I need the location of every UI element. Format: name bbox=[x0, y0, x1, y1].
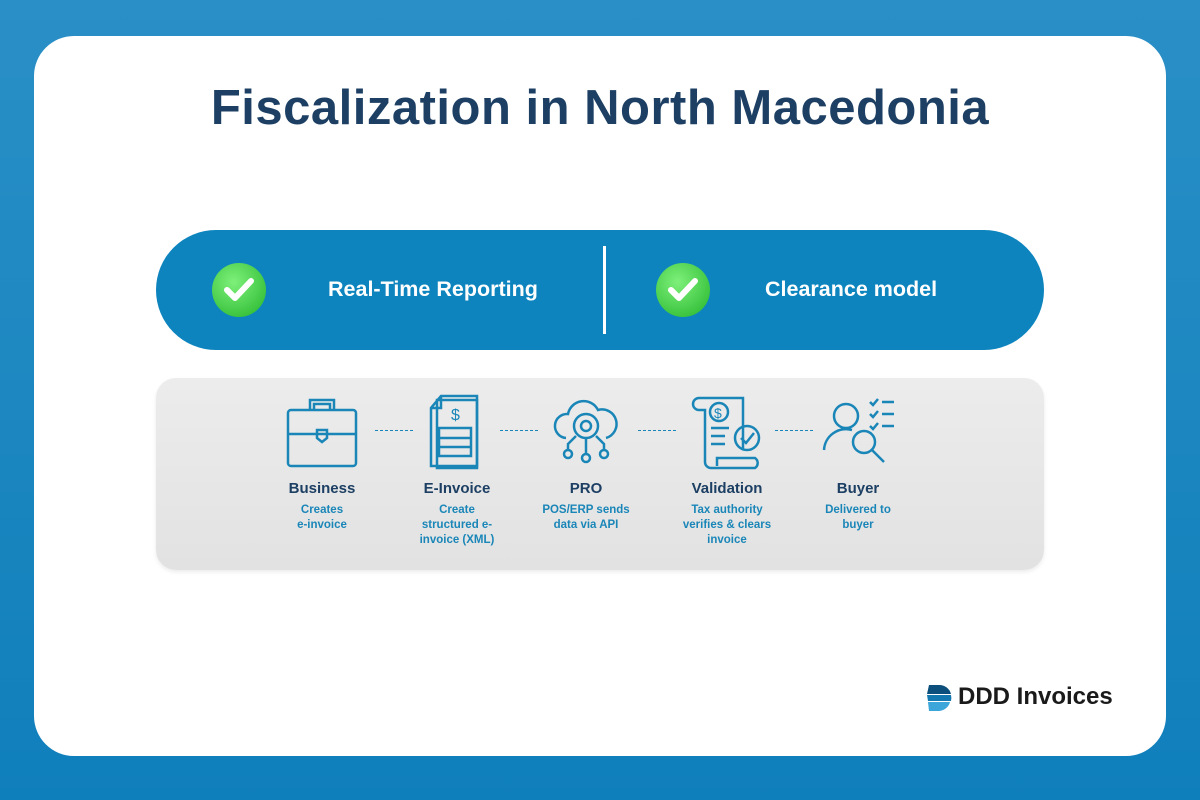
step: PRO: data via API bbox=[554, 519, 618, 531]
step: business bbox=[286, 398, 358, 531]
step: e-invoice: Create bbox=[439, 504, 475, 516]
arrow bbox=[775, 430, 813, 431]
title: Fiscalization in North Macedonia bbox=[211, 81, 989, 135]
step: validation: Tax authority bbox=[691, 504, 763, 516]
step: PRO: POS/ERP sends bbox=[542, 504, 630, 516]
panel: process flow bbox=[156, 378, 1044, 570]
step: validation: invoice bbox=[707, 534, 747, 546]
banner: models bbox=[156, 230, 1044, 350]
step: e-invoice: E-Invoice bbox=[424, 480, 490, 497]
step: validation: $ bbox=[714, 405, 722, 421]
arrow bbox=[638, 430, 676, 431]
icon: check 1 bbox=[212, 263, 266, 317]
step: e-invoice: structured e- bbox=[422, 519, 492, 531]
arrow bbox=[500, 430, 538, 431]
logo: DDD Invoices: DDD Invoices bbox=[958, 683, 1113, 710]
step: e-invoice bbox=[420, 394, 494, 546]
label: clearance model: Clearance model bbox=[765, 277, 937, 301]
step: PRO: PRO bbox=[570, 480, 602, 497]
step: e-invoice: invoice (XML) bbox=[420, 534, 494, 546]
step: PRO bbox=[542, 400, 630, 531]
step: business: Business bbox=[289, 480, 355, 497]
step: business: e-invoice bbox=[297, 519, 347, 531]
step: buyer bbox=[822, 398, 894, 531]
step: buyer: Buyer bbox=[837, 480, 879, 497]
label: real-time reporting: Real-Time Reporting bbox=[328, 277, 538, 301]
step: validation: verifies & clears bbox=[683, 519, 771, 531]
step: buyer: buyer bbox=[842, 519, 874, 531]
icon: check 2 bbox=[656, 263, 710, 317]
divider bbox=[603, 246, 606, 334]
step: business: Creates bbox=[301, 504, 343, 516]
step: validation bbox=[683, 396, 771, 546]
step: validation: Validation bbox=[692, 480, 762, 497]
step: e-invoice: $ bbox=[451, 407, 460, 424]
arrow bbox=[375, 430, 413, 431]
step: buyer: Delivered to bbox=[825, 504, 891, 516]
